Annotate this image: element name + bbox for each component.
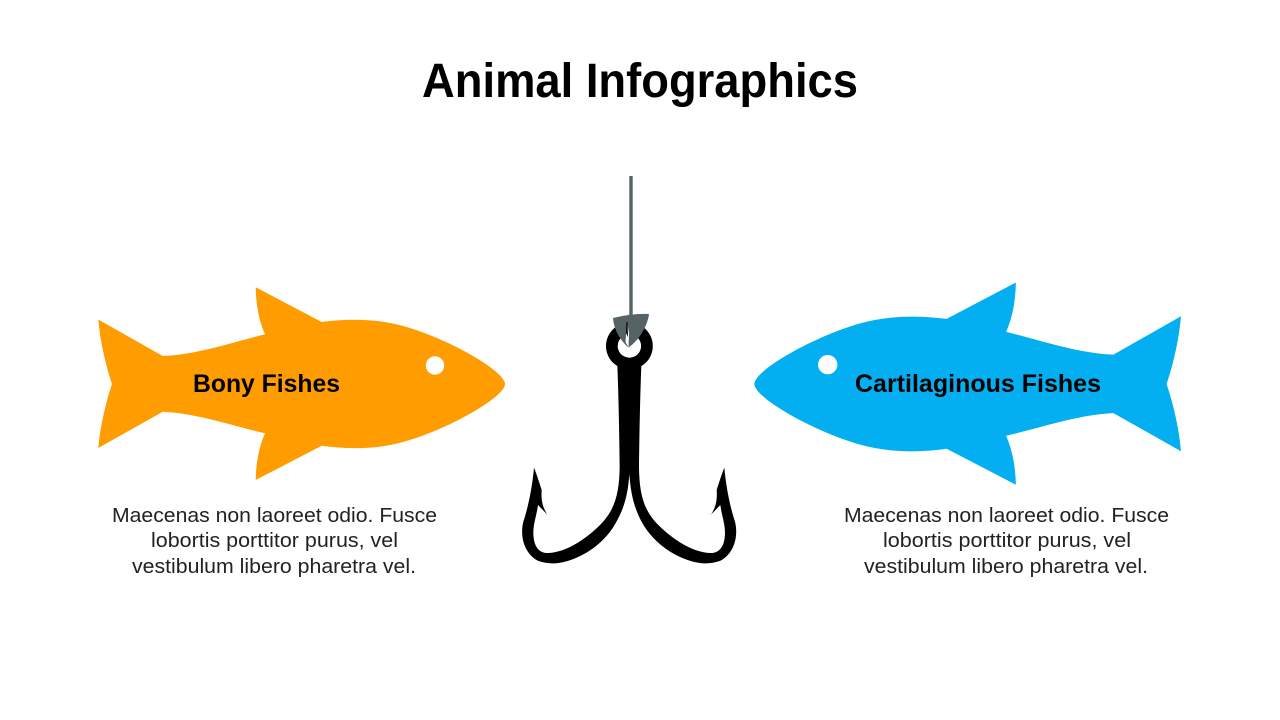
icon: fishing hook (522, 176, 736, 563)
fish label: Cartilaginous Fishes (855, 370, 1101, 398)
blue fish body (754, 282, 1181, 485)
hook eye ring (606, 323, 653, 369)
text block: left description: Maecenas non laoreet odio. Fusce (112, 505, 437, 527)
fish label: Bony Fishes (193, 370, 340, 398)
text block: right description: lobortis porttitor purus, vel (883, 530, 1131, 552)
knot slit (626, 322, 629, 348)
hook shank and barbs (522, 365, 736, 563)
text block: right description (844, 505, 1169, 578)
fish: cartilaginous fishes (754, 282, 1181, 485)
text block: left description: vestibulum libero pharetra vel. (132, 556, 416, 578)
text block: right description: vestibulum libero pharetra vel. (864, 556, 1148, 578)
knot slit shadow (626, 322, 628, 337)
fish eye (818, 355, 837, 374)
fishing line (629, 176, 633, 326)
fish: bony fishes (98, 287, 505, 480)
title: Animal Infographics (422, 55, 858, 108)
text block: left description: lobortis porttitor purus, vel (151, 530, 398, 552)
fish eye (426, 356, 444, 375)
orange fish body (98, 287, 505, 480)
text block: left description (112, 505, 437, 578)
text block: right description: Maecenas non laoreet odio. Fusce (844, 505, 1169, 527)
line knot (613, 314, 649, 348)
